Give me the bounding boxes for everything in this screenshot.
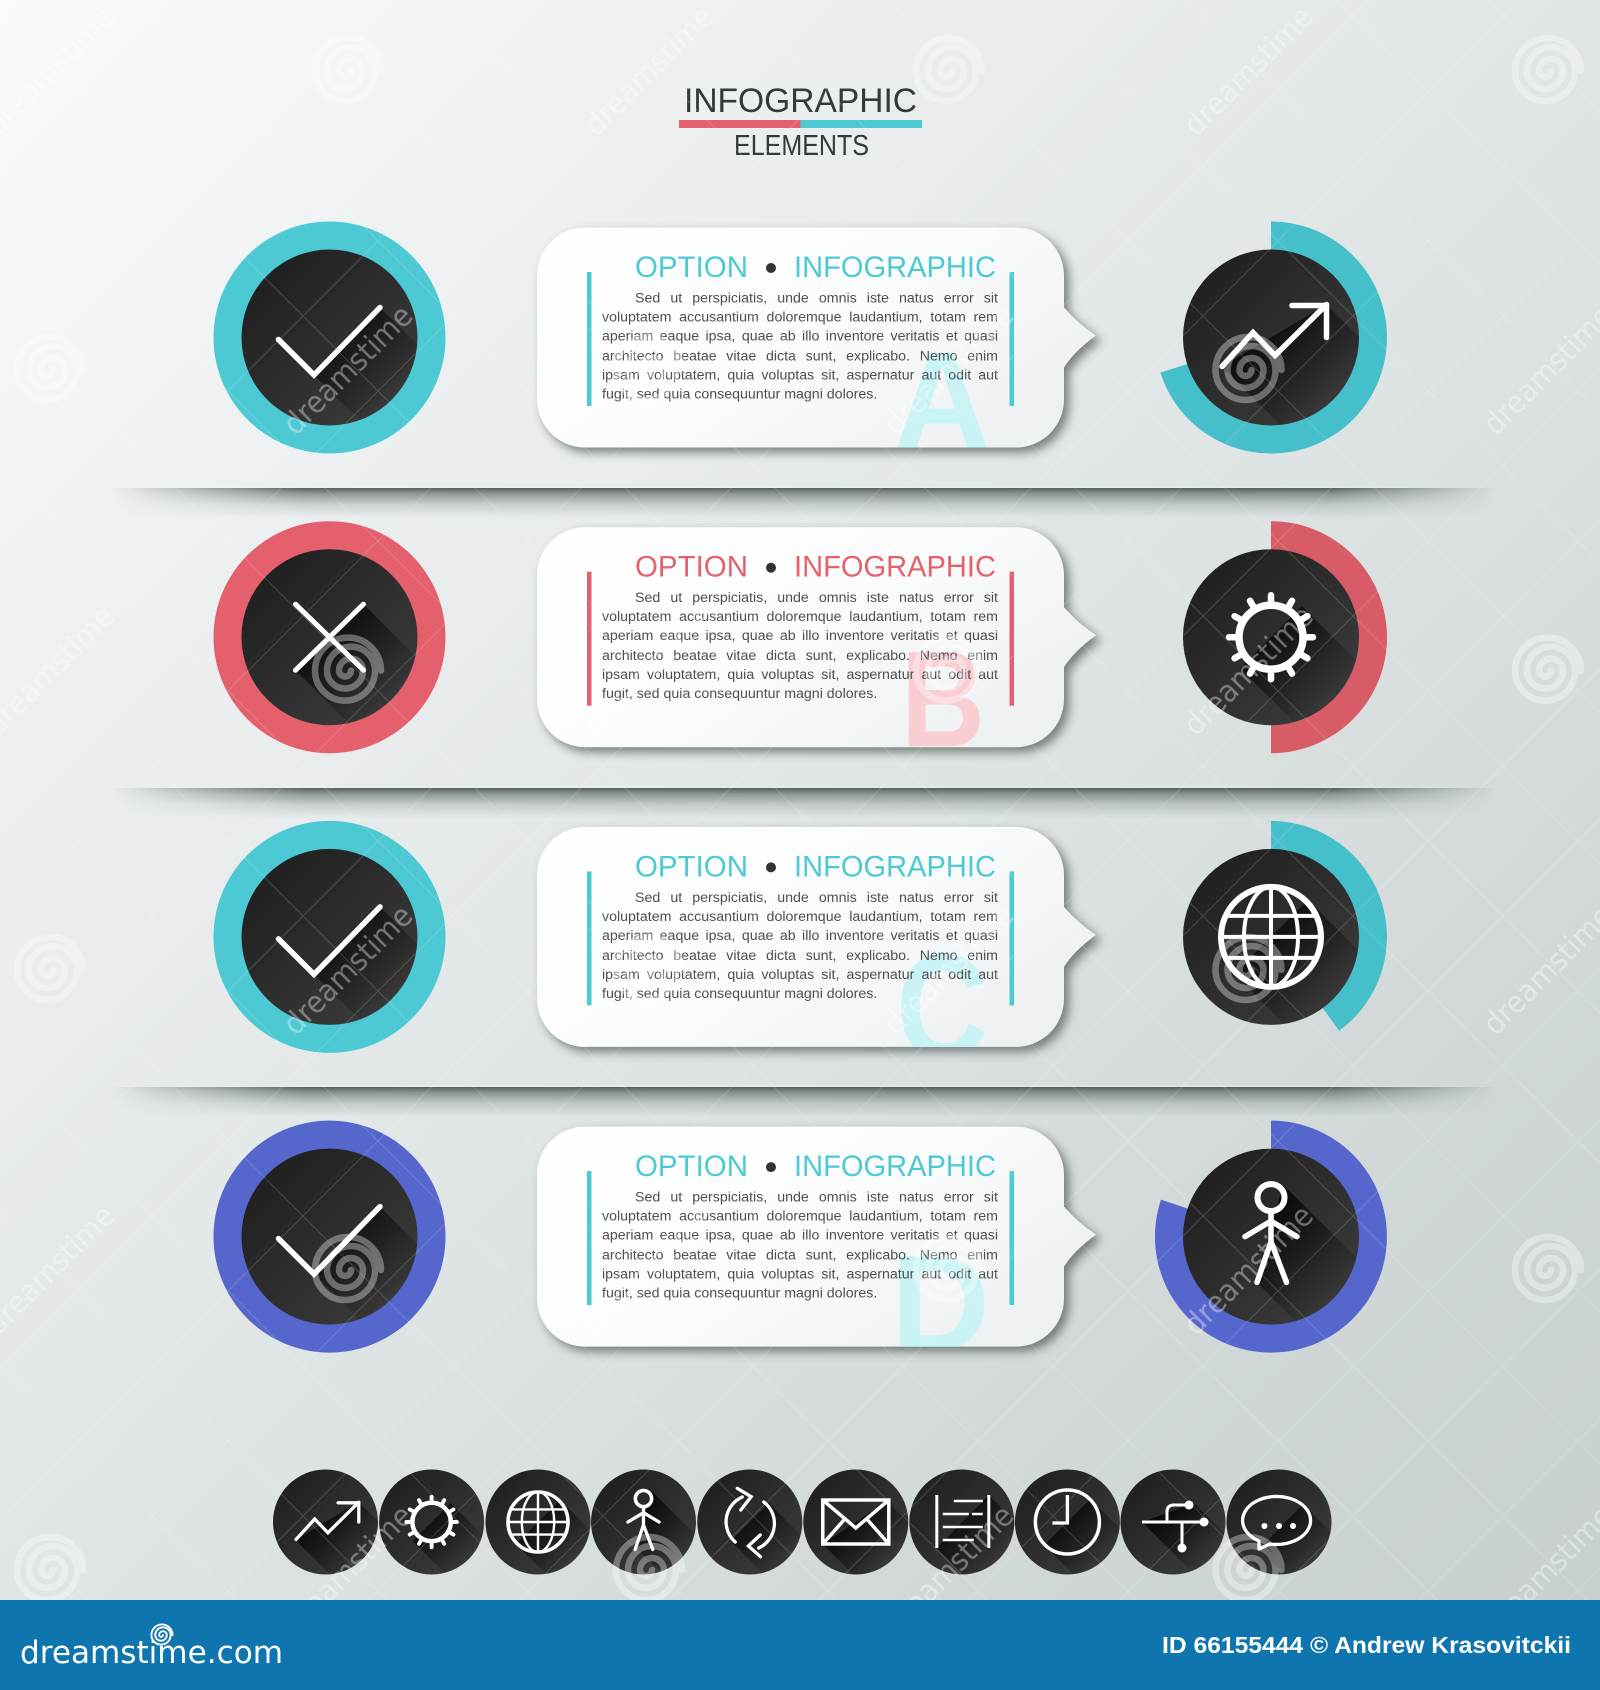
card heading: INFOGRAPHIC bbox=[794, 251, 996, 284]
card D bbox=[537, 1127, 1101, 1381]
card heading: OPTION bbox=[635, 1150, 748, 1183]
card B bbox=[537, 527, 1101, 776]
right badge: globe bbox=[1183, 820, 1387, 1031]
right badge: person bbox=[1154, 1120, 1387, 1353]
left badge: check bbox=[214, 820, 446, 1053]
letter D: D bbox=[891, 1228, 990, 1381]
card body text: Sed ut perspiciatis, unde omnis iste natus error sit bbox=[635, 590, 998, 606]
letter B: B bbox=[901, 623, 985, 776]
card body text: architecto beatae vitae dicta sunt, explicabo. Nemo enim bbox=[602, 648, 998, 664]
right accent bar bbox=[1010, 272, 1014, 406]
card body text: aperiam eaque ipsa, quae ab illo inventore veritatis et quasi bbox=[602, 1228, 998, 1244]
card body text: voluptatem accusantium doloremque laudantium, totam rem bbox=[602, 1209, 998, 1225]
divider shadow 3 bbox=[122, 1086, 1486, 1114]
card heading bbox=[635, 251, 996, 284]
card body text: architecto beatae vitae dicta sunt, explicabo. Nemo enim bbox=[602, 348, 998, 364]
card body text: voluptatem accusantium doloremque laudantium, totam rem bbox=[602, 909, 998, 925]
row A bbox=[214, 222, 1387, 460]
card body text: voluptatem accusantium doloremque laudantium, totam rem bbox=[602, 310, 998, 326]
card body text: architecto beatae vitae dicta sunt, explicabo. Nemo enim bbox=[602, 948, 998, 964]
watermark: dreamstime bbox=[277, 899, 420, 1042]
card body text: Sed ut perspiciatis, unde omnis iste natus error sit bbox=[635, 290, 998, 306]
card body text bbox=[602, 589, 998, 707]
card heading: OPTION bbox=[635, 850, 748, 883]
card heading bbox=[635, 1150, 996, 1183]
card heading bbox=[635, 850, 996, 883]
card heading: INFOGRAPHIC bbox=[794, 850, 996, 883]
card body text: fugit, sed quia consequuntur magni dolores. bbox=[602, 387, 877, 403]
row C bbox=[214, 820, 1387, 1059]
right accent bar bbox=[1010, 871, 1014, 1005]
footer logo text: dreamstime.com bbox=[20, 1635, 283, 1671]
watermark: dreamstime bbox=[578, 599, 721, 743]
card body text: ipsam voluptatem, quia voluptas sit, aspernatur aut odit aut bbox=[602, 367, 998, 383]
icon: check mark bbox=[278, 907, 380, 974]
small icon: chat bbox=[1226, 1470, 1332, 1574]
icon: person bbox=[1245, 1184, 1297, 1282]
title: infographic: INFOGRAPHIC bbox=[684, 82, 917, 120]
right accent bar bbox=[1010, 572, 1014, 706]
title: elements: ELEMENTS bbox=[734, 130, 869, 162]
card body text bbox=[602, 889, 998, 1007]
card A bbox=[537, 228, 1101, 478]
divider shadow 1 bbox=[120, 486, 1487, 514]
footer credit: ID 66155444 © Andrew Krasovitckii bbox=[1162, 1632, 1571, 1658]
card heading bbox=[635, 551, 996, 584]
watermark: dreamstime bbox=[277, 1499, 420, 1642]
small icon: trend bbox=[273, 1470, 378, 1574]
small icon: gear bbox=[379, 1470, 484, 1574]
icon: trend arrow bbox=[1222, 304, 1326, 366]
left accent bar bbox=[587, 572, 592, 706]
card body text: voluptatem accusantium doloremque laudantium, totam rem bbox=[602, 609, 998, 625]
small icon: person bbox=[591, 1470, 696, 1574]
card body text: Sed ut perspiciatis, unde omnis iste natus error sit bbox=[635, 1190, 998, 1206]
card heading: INFOGRAPHIC bbox=[794, 551, 996, 584]
card body text bbox=[602, 1189, 998, 1307]
small icon: list bbox=[909, 1470, 1014, 1574]
row B bbox=[214, 521, 1387, 760]
card body text: architecto beatae vitae dicta sunt, explicabo. Nemo enim bbox=[602, 1247, 998, 1263]
footer bar bbox=[0, 1600, 1600, 1690]
icon row bbox=[273, 1470, 1332, 1574]
card body text: aperiam eaque ipsa, quae ab illo inventore veritatis et quasi bbox=[602, 329, 998, 345]
card body text: Sed ut perspiciatis, unde omnis iste natus error sit bbox=[635, 890, 998, 906]
watermark: dreamstime bbox=[1177, 1199, 1321, 1342]
card heading: INFOGRAPHIC bbox=[794, 1150, 996, 1183]
watermark: dreamstime bbox=[878, 899, 1021, 1042]
right badge: gear bbox=[1183, 521, 1387, 754]
letter C: C bbox=[896, 923, 988, 1091]
card C bbox=[535, 825, 1104, 1059]
card body text: aperiam eaque ipsa, quae ab illo inventore veritatis et quasi bbox=[602, 629, 998, 645]
row D bbox=[214, 1120, 1387, 1358]
icon: globe bbox=[1221, 887, 1321, 987]
card body text: ipsam voluptatem, quia voluptas sit, aspernatur aut odit aut bbox=[602, 967, 998, 983]
watermark: dreamstime bbox=[1177, 599, 1321, 743]
card body text: ipsam voluptatem, quia voluptas sit, aspernatur aut odit aut bbox=[602, 1266, 998, 1282]
left badge: cross bbox=[214, 521, 446, 754]
icon: check mark bbox=[278, 1207, 380, 1274]
small icon: globe bbox=[486, 1470, 590, 1574]
title underline bbox=[679, 120, 922, 128]
card body text: fugit, sed quia consequuntur magni dolores. bbox=[602, 686, 877, 702]
right accent bar bbox=[1010, 1171, 1014, 1305]
footer logo spiral bbox=[151, 1624, 173, 1645]
card heading: OPTION bbox=[635, 251, 748, 284]
left accent bar bbox=[587, 871, 592, 1005]
divider shadow 2 bbox=[120, 786, 1487, 814]
card body text: ipsam voluptatem, quia voluptas sit, aspernatur aut odit aut bbox=[602, 667, 998, 683]
left badge: check bbox=[214, 222, 446, 454]
small icon: clock bbox=[1014, 1470, 1120, 1574]
letter A: A bbox=[894, 323, 990, 478]
left accent bar bbox=[587, 272, 592, 406]
icon: check mark bbox=[278, 308, 380, 375]
card body text: fugit, sed quia consequuntur magni dolores. bbox=[602, 986, 877, 1002]
title bbox=[679, 82, 922, 162]
left badge: check bbox=[214, 1120, 446, 1353]
small icon: network bbox=[1120, 1470, 1226, 1574]
icon: cross bbox=[296, 604, 364, 670]
left accent bar bbox=[587, 1171, 592, 1305]
small icon: mail bbox=[803, 1470, 908, 1574]
card heading: OPTION bbox=[635, 551, 748, 584]
card body text bbox=[602, 290, 998, 408]
watermark: dreamstime bbox=[878, 299, 1021, 442]
card body text: fugit, sed quia consequuntur magni dolores. bbox=[602, 1286, 877, 1302]
watermark: dreamstime bbox=[878, 1499, 1021, 1642]
watermark: dreamstime bbox=[578, 1199, 721, 1342]
icon: gear bbox=[1229, 595, 1313, 679]
watermark: dreamstime bbox=[277, 299, 420, 442]
card body text: aperiam eaque ipsa, quae ab illo inventore veritatis et quasi bbox=[602, 928, 998, 944]
small icon: refresh bbox=[697, 1470, 802, 1574]
right badge: trend bbox=[1160, 222, 1387, 454]
